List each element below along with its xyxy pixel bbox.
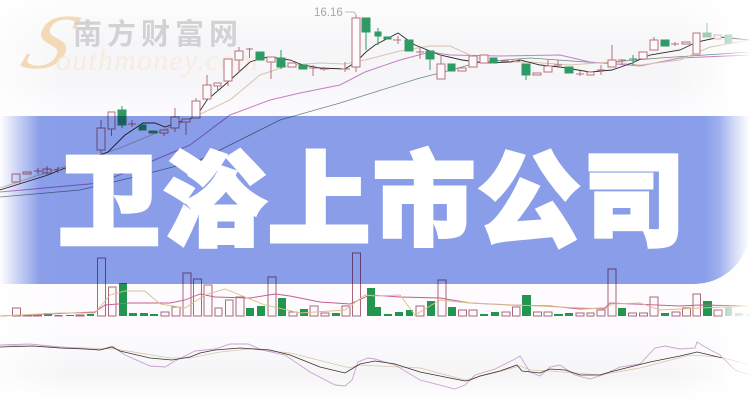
- high price label: 16.16: [314, 7, 343, 19]
- title: 卫浴上市公司: [58, 145, 688, 259]
- high price label: [314, 7, 356, 19]
- logo domain: outhmoney.com: [56, 44, 259, 77]
- faded volume bars: [725, 307, 750, 316]
- watermark logo: [11, 0, 259, 85]
- rising candles: [12, 15, 700, 182]
- logo letter S: S: [11, 0, 91, 85]
- volume average lines: [0, 289, 750, 316]
- faded right candles: [703, 23, 732, 43]
- logo Chinese name: 南方财富网: [73, 18, 243, 51]
- moving average lines: [0, 33, 750, 197]
- falling candles: [118, 18, 669, 133]
- title band: [0, 116, 750, 284]
- volume up bars: [12, 253, 722, 316]
- volume down bars: [44, 283, 712, 316]
